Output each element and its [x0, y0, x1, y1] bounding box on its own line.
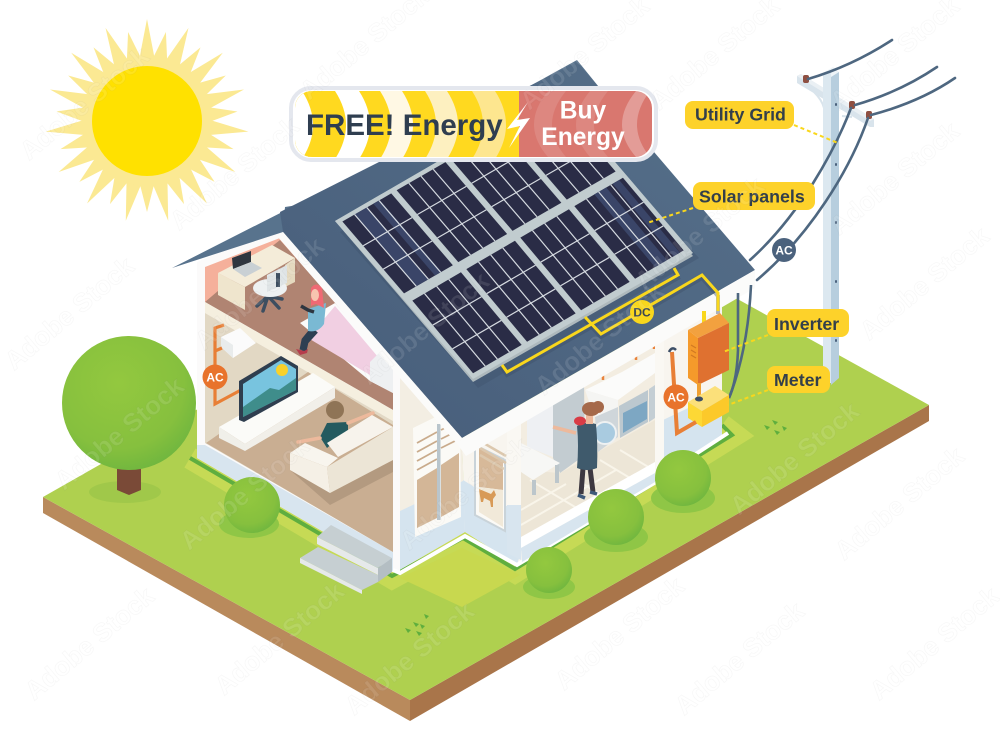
banner text: free energy: FREE! Energy [306, 109, 503, 142]
watermark: Adobe Stock [19, 580, 160, 706]
watermark: Adobe Stock [14, 40, 155, 166]
table [521, 443, 560, 495]
callout: solar panels: Solar panels [699, 186, 805, 206]
service cables to meter [729, 285, 751, 398]
watermark: Adobe Stock [394, 430, 535, 556]
AC wiring to meter [664, 348, 696, 433]
watermark: Adobe Stock [549, 570, 690, 696]
shrub [219, 477, 280, 538]
insulators [803, 75, 872, 119]
woman on bed [296, 284, 326, 355]
shrub [584, 489, 648, 552]
AC badge: AC [206, 370, 224, 384]
AC wiring to meter: AC [667, 390, 685, 404]
roof [172, 60, 755, 456]
utility pole [797, 67, 874, 385]
callout: meter: Meter [774, 370, 822, 390]
air conditioner [221, 328, 256, 358]
watermark: Adobe Stock [164, 110, 305, 236]
front steps [300, 525, 392, 594]
kitchen [507, 331, 664, 562]
watermark: Adobe Stock [209, 575, 350, 701]
watermark: Adobe Stock [824, 115, 965, 241]
watermark: Adobe Stock [854, 220, 995, 346]
side panel [527, 400, 553, 457]
bed [300, 303, 393, 393]
callout: inverter: Inverter [774, 314, 839, 334]
banner text: buy energy: Buy [560, 98, 607, 124]
television [239, 356, 298, 422]
icon: lightning bolt [507, 102, 530, 148]
solar panels [335, 93, 693, 382]
gable wall [393, 352, 465, 572]
counter [585, 353, 655, 418]
woman in kitchen [553, 401, 604, 498]
grid AC badge [772, 238, 796, 262]
man on couch [298, 401, 373, 448]
power lines [750, 40, 955, 280]
AC badge [202, 364, 228, 390]
DC badge [630, 300, 654, 324]
oven [619, 385, 655, 438]
TV console [219, 373, 335, 451]
inverter box [688, 313, 729, 385]
lower room [202, 313, 393, 552]
fridge [553, 382, 585, 473]
ground platform [43, 202, 929, 721]
yellow link to inverter [702, 311, 706, 327]
watermark: Adobe Stock [174, 430, 315, 556]
upper room [205, 238, 393, 421]
sun [45, 19, 249, 223]
watermark: Adobe Stock [829, 440, 970, 566]
watermark: Adobe Stock [669, 595, 810, 721]
grid AC badge: AC [775, 244, 793, 258]
house walls [197, 226, 755, 573]
DC wiring [502, 268, 718, 375]
washing machine [594, 407, 618, 452]
banner text: buy energy: Energy [541, 124, 625, 151]
cat [479, 489, 496, 507]
porch window with cat [475, 441, 506, 531]
watermark: Adobe Stock [724, 395, 865, 521]
watermark: Adobe Stock [189, 230, 330, 356]
callout: utility grid [685, 101, 838, 143]
AC wiring [215, 325, 241, 404]
front wall [462, 272, 755, 565]
energy banner [288, 88, 656, 162]
watermark: Adobe Stock [49, 370, 190, 496]
callout: meter [728, 366, 830, 405]
gable window [413, 405, 461, 537]
callout: inverter [723, 309, 849, 352]
shrub [523, 547, 575, 599]
watermark: Adobe Stock [529, 275, 670, 401]
columns [507, 417, 521, 508]
callout: solar panels [647, 182, 815, 223]
meter box [688, 386, 729, 427]
watermark: Adobe Stock [629, 170, 770, 296]
cut wall frame [197, 226, 400, 572]
callout: utility grid: Utility Grid [695, 104, 786, 124]
watermark: Adobe Stock [0, 250, 140, 376]
couch [290, 415, 393, 493]
watermark: Adobe Stock [339, 595, 480, 721]
icon: grass tufts [405, 420, 787, 636]
office chair [253, 265, 287, 311]
shrub [651, 450, 715, 513]
desk [218, 245, 295, 310]
DC badge: DC [633, 306, 651, 320]
tree [62, 336, 196, 503]
watermark: Adobe Stock [354, 265, 495, 391]
